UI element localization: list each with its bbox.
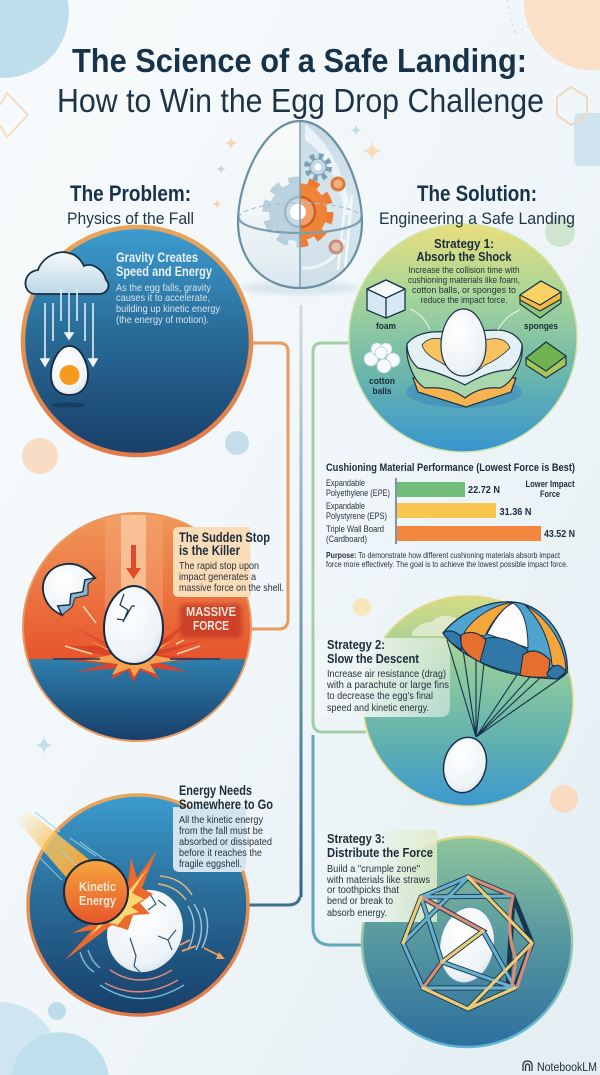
text: strategy 1: cushioning materials like foam, (408, 275, 520, 286)
icon: green sponge (526, 342, 566, 378)
text: strategy 2: with a parachute or large fins (326, 679, 449, 691)
text: strategy 1: cotton balls, or sponges to (412, 285, 516, 296)
icon: cloud (25, 252, 108, 294)
icon: broken shell (43, 564, 95, 615)
title: How to Win the Egg Drop Challenge (57, 82, 544, 119)
icon: yellow sponge (520, 281, 561, 318)
gear: small blue (307, 156, 329, 178)
heading: the solution (379, 181, 575, 228)
text: strategy 2: Increase air resistance (drag) (327, 668, 446, 680)
bar labels (326, 478, 390, 544)
text: sudden stop (173, 527, 284, 597)
text: sudden stop: The Sudden Stop (179, 530, 270, 545)
text: gravity: (the energy of motion). (116, 314, 209, 326)
icon: kinetic energy ball: Kinetic (79, 879, 116, 894)
panel: energy needs somewhere to go (15, 783, 273, 1015)
text: strategy 3: with materials like straws (326, 874, 430, 886)
text: gravity: As the egg falls, gravity (116, 282, 212, 294)
icon: cushioned nest with egg (406, 309, 522, 408)
text: strategy 3: Strategy 3: (327, 832, 385, 846)
bar labels: Polystyrene (EPS) (326, 511, 387, 521)
text: strategy 1: Increase the collision time with (408, 265, 520, 276)
connector lines (247, 305, 366, 945)
icon: comet tail (15, 812, 108, 884)
panel: strategy 3 distribute the force (315, 830, 572, 1047)
text: energy needs (173, 783, 273, 872)
icon: falling arrows (41, 290, 97, 366)
text: strategy 3 (315, 830, 437, 922)
icon: egg inside straw frame (434, 903, 500, 987)
gear: main (267, 181, 329, 243)
text: strategy 3: bend or break to (327, 895, 393, 907)
text: energy needs: from the fall must be (179, 825, 263, 837)
annotation: lower impact force (526, 479, 575, 500)
icon: egg under parachute (438, 733, 492, 797)
central egg with gears (238, 120, 364, 295)
text: strategy 2: Strategy 2: (327, 638, 385, 652)
icon: impact arrow (126, 545, 141, 579)
text: energy needs: Somewhere to Go (179, 797, 273, 812)
label: cotton balls: balls (372, 386, 392, 397)
icon: parachute (443, 602, 567, 737)
panel: the sudden stop is the killer (20, 510, 284, 744)
chart: cushioning material performance (326, 462, 575, 569)
label: cotton balls (369, 376, 395, 397)
text: sudden stop: The rapid stop upon (179, 560, 259, 572)
gear: small orange (332, 178, 344, 190)
callout: massive force: FORCE (193, 618, 229, 633)
icon: cracked egg (94, 877, 196, 985)
panel: strategy 1 absorb the shock (349, 224, 577, 452)
label: cotton balls: cotton (369, 376, 395, 387)
text: gravity: Gravity Creates (116, 250, 198, 265)
icon: cotton balls (364, 343, 400, 373)
text: strategy 3: Build a "crumple zone" (327, 863, 420, 875)
callout: massive force: MASSIVE (186, 604, 236, 619)
text: strategy 3: absorb energy. (327, 907, 387, 919)
icon: cracked egg (104, 586, 163, 664)
text: strategy 1: Absorb the Shock (416, 250, 512, 264)
icon: straw crumple zone frame (403, 877, 532, 1009)
label: foam: foam (376, 321, 396, 332)
bar values (468, 484, 575, 540)
text: energy needs: absorbed or dissipated (179, 836, 272, 848)
icon: burst (65, 850, 157, 960)
text: energy needs: Energy Needs (179, 783, 252, 798)
text: sudden stop: impact generates a (179, 571, 256, 583)
bar labels: Polyethylene (EPE) (326, 488, 390, 498)
chart note: purpose (326, 550, 568, 569)
text: sudden stop: is the Killer (179, 543, 241, 558)
bar labels: Expandable (326, 478, 365, 488)
text: strategy 1: Strategy 1: (434, 237, 494, 251)
icon: dissipation arrow (180, 940, 225, 959)
text: energy needs: fragile eggshell. (179, 858, 242, 870)
icon: falling egg (51, 346, 88, 408)
icon: kinetic energy ball (64, 860, 128, 924)
heading: the problem: Physics of the Fall (67, 209, 194, 228)
bar labels: Triple Wall Board (326, 524, 384, 534)
title (57, 42, 544, 119)
text: gravity: building up kinetic energy (116, 303, 221, 315)
gear: small pink (330, 241, 342, 253)
icon: foam cube (367, 280, 405, 318)
annotation: lower impact force: Lower Impact (526, 479, 575, 490)
bars (396, 478, 541, 544)
text: gravity (116, 250, 221, 326)
text: strategy 2 (315, 638, 450, 717)
text: strategy 2: speed and kinetic energy. (327, 702, 429, 714)
panel: strategy 2 slow the descent (315, 596, 573, 806)
heading: the problem: The Problem: (70, 181, 191, 206)
panel: gravity creates speed and energy (23, 227, 251, 455)
icon: energy waves (80, 876, 208, 998)
text: strategy 2: to decrease the egg's final (327, 690, 433, 702)
text: energy needs: before it reaches the (179, 847, 262, 859)
title: The Science of a Safe Landing: (72, 42, 527, 79)
text: strategy 2: Slow the Descent (327, 652, 420, 666)
text: strategy 3: or toothpicks that (327, 884, 399, 896)
text: gravity: causes it to accelerate, (116, 292, 210, 304)
annotation: lower impact force: Force (540, 489, 560, 500)
icon: sparkles (211, 123, 384, 210)
text: strategy 1 (408, 237, 520, 306)
text: energy needs: All the kinetic energy (179, 814, 264, 826)
heading: the solution: Engineering a Safe Landing (379, 209, 575, 228)
label: sponges: sponges (524, 321, 558, 332)
text: strategy 1: reduce the impact force. (420, 295, 508, 306)
text: sudden stop: massive force on the shell. (179, 582, 284, 594)
icon: impact burst (53, 606, 220, 682)
text: strategy 3: Distribute the Force (327, 846, 433, 860)
bar labels: (Cardboard) (326, 534, 367, 544)
bar values: 31.36 N (500, 506, 532, 518)
callout: massive force (180, 604, 242, 638)
bar labels: Expandable (326, 501, 365, 511)
bar values: 22.72 N (468, 484, 500, 496)
chart note: purpose: Purpose: To demonstrate how different cushioning materials absorb impact (326, 550, 561, 560)
heading: the problem (67, 181, 194, 228)
heading: the solution: The Solution: (417, 181, 537, 206)
bar values: 43.52 N (544, 528, 575, 540)
text: gravity: Speed and Energy (116, 264, 212, 279)
icon: kinetic energy ball: Energy (79, 893, 117, 908)
